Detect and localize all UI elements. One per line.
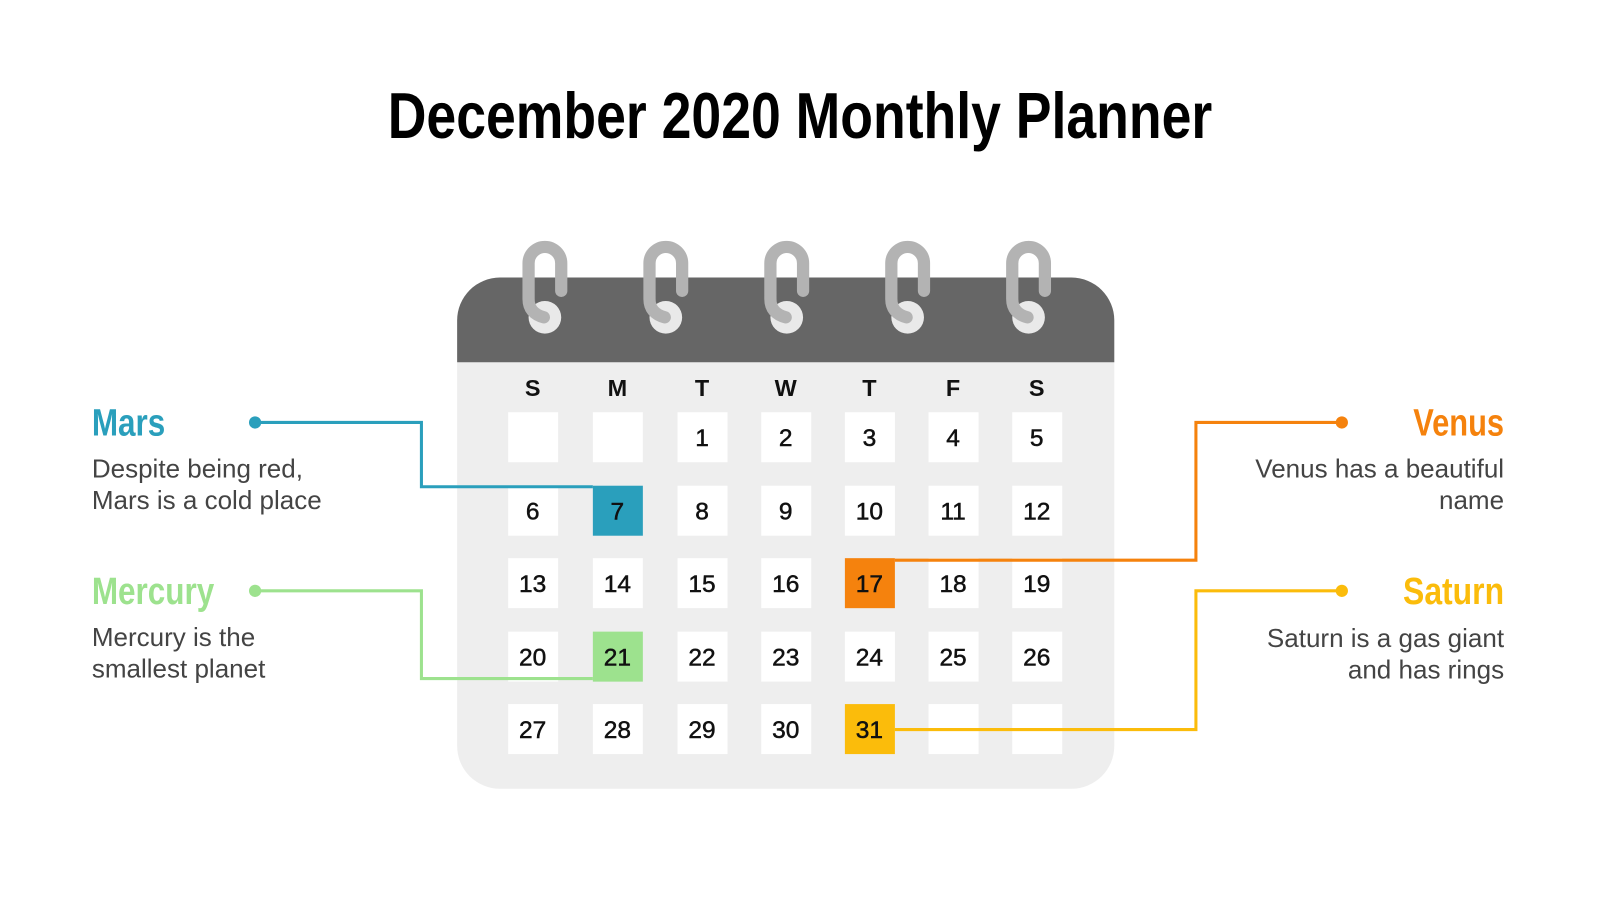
day numbers: 1: [695, 425, 709, 452]
calendar: [457, 247, 1114, 789]
connector: Venus: [895, 416, 1348, 560]
text block: Venus: name: [1439, 485, 1504, 515]
text block: Mars: [92, 402, 322, 515]
text block: Mercury: Mercury is the: [92, 622, 255, 652]
title: December 2020 Monthly Planner: [388, 79, 1212, 152]
text block: Mars: Mars is a cold place: [92, 485, 322, 515]
rings: [529, 247, 1045, 334]
day numbers: 19: [1023, 571, 1050, 598]
text block: Mars: Mars: [92, 402, 165, 444]
weekday labels: S: [1029, 375, 1045, 401]
day numbers: 9: [779, 498, 793, 525]
day numbers: 2: [779, 425, 793, 452]
day numbers: 17: [856, 571, 883, 598]
day numbers: 28: [604, 717, 631, 744]
day numbers: 12: [1023, 498, 1050, 525]
weekday labels: [525, 375, 1045, 401]
day numbers: 29: [688, 717, 716, 744]
text block: Venus: Venus: [1413, 402, 1504, 444]
weekday labels: M: [608, 375, 627, 401]
day numbers: 3: [863, 425, 876, 452]
day numbers: 22: [688, 644, 716, 671]
text block: Mercury: smallest planet: [92, 654, 266, 684]
weekday labels: F: [946, 375, 960, 401]
weekday labels: W: [775, 375, 798, 401]
connector: Saturn: [895, 585, 1348, 730]
day numbers: 30: [772, 717, 799, 744]
text block: Saturn: Saturn: [1403, 570, 1504, 612]
day numbers: 4: [946, 425, 960, 452]
day numbers: [519, 425, 1050, 744]
day cells: [508, 412, 1062, 754]
day numbers: 8: [695, 498, 709, 525]
day numbers: 24: [856, 644, 883, 671]
calendar header: [457, 278, 1114, 362]
day numbers: 14: [604, 571, 631, 598]
calendar body: [457, 278, 1114, 789]
day numbers: 20: [519, 644, 546, 671]
day numbers: 27: [519, 717, 546, 744]
text block: Saturn: Saturn is a gas giant: [1267, 623, 1505, 653]
text block: Mercury: Mercury: [92, 570, 214, 612]
day numbers: 18: [939, 571, 967, 598]
day numbers: 11: [940, 498, 966, 525]
text block: Venus: [1255, 402, 1504, 515]
day numbers: 7: [611, 498, 624, 525]
day numbers: 21: [604, 644, 631, 671]
connector: Mars: [249, 416, 593, 487]
text block: Mercury: [92, 570, 266, 684]
day numbers: 23: [772, 644, 799, 671]
weekday labels: T: [695, 375, 710, 401]
text block: Mars: Despite being red,: [92, 454, 303, 484]
connector: Mercury: [249, 585, 593, 679]
text block: Saturn: and has rings: [1348, 655, 1504, 685]
day numbers: 16: [772, 571, 799, 598]
text block: Venus: Venus has a beautiful: [1255, 454, 1504, 484]
day numbers: 26: [1023, 644, 1050, 671]
text block: Saturn: [1267, 570, 1505, 685]
day numbers: 15: [688, 571, 716, 598]
day numbers: 13: [519, 571, 546, 598]
day numbers: 10: [856, 498, 883, 525]
day numbers: 6: [526, 498, 539, 525]
weekday labels: S: [525, 375, 540, 401]
day numbers: 31: [856, 717, 883, 744]
weekday labels: T: [862, 375, 877, 401]
day numbers: 5: [1030, 425, 1044, 452]
day numbers: 25: [939, 644, 967, 671]
